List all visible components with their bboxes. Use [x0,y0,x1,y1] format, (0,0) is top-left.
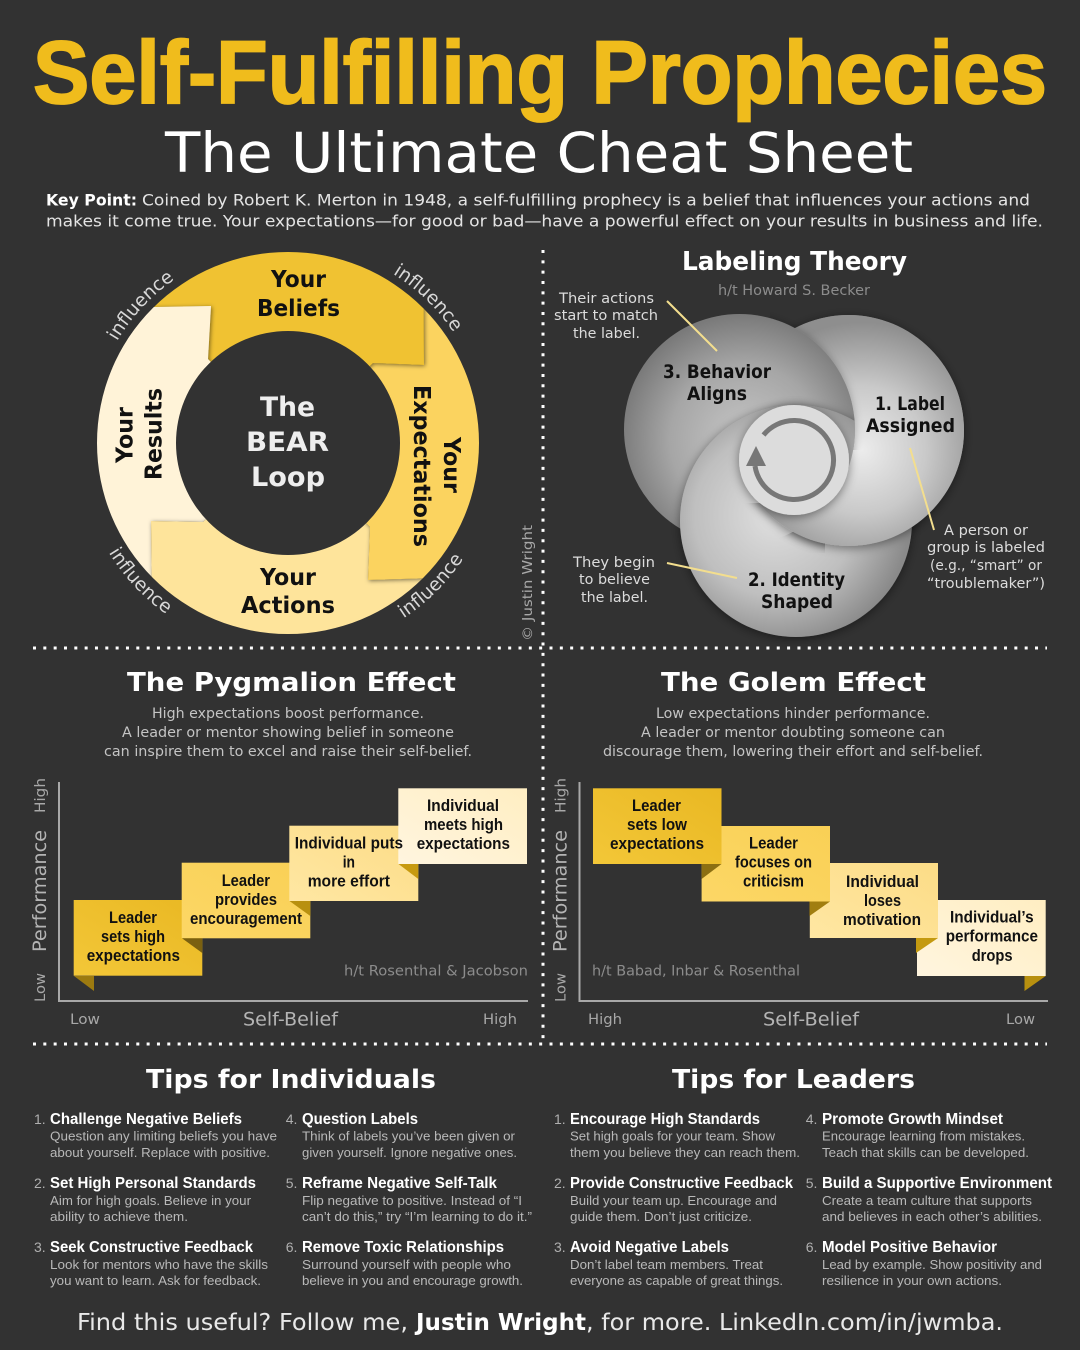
step 1: sets low [627,816,687,834]
footer: , for more. LinkedIn.com/in/jwmba. [586,1310,1003,1336]
x axis labels: Self-Belief [243,1008,339,1030]
step 2: Leader [749,835,799,853]
y axis labels [29,778,51,1002]
step 4: expectations [417,835,510,853]
tip 4: given yourself. Ignore negative ones. [302,1145,517,1160]
label: label assigned: Assigned [866,415,955,437]
icon: cycle arrow [746,421,834,500]
tip 2: Build your team up. Encourage and [570,1193,777,1208]
x axis labels: Self-Belief [763,1008,860,1030]
y axis labels: Performance [29,830,51,952]
panel: pygmalion effect [29,668,528,1030]
label: behavior aligns: Aligns [687,383,747,405]
step 4: Individual’s [950,909,1034,927]
callout: behavior: start to match [554,308,658,324]
footer [77,1310,1003,1336]
y axis labels [549,778,571,1002]
pinwheel circles [624,314,964,637]
label: behavior aligns: 3. Behavior [663,361,772,383]
tip 3: everyone as capable of great things. [570,1273,783,1288]
label: the BEAR loop: BEAR [246,427,329,458]
description [603,706,983,760]
tip 3 [554,1239,783,1288]
tip 2: Aim for high goals. Believe in your [50,1193,252,1208]
step 3: in [343,854,355,872]
step 4: meets high [424,816,503,834]
tip 1: Encourage High Standards [570,1111,760,1128]
description: discourage them, lowering their effort and self-belief. [603,744,983,760]
tip 2: guide them. Don’t just criticize. [570,1209,752,1224]
callout: label: “troublemaker”) [927,576,1045,592]
step 2: focuses on [735,854,812,872]
label: your expectations: Your [438,436,464,494]
step 1: Leader [632,797,682,815]
tip 4: Think of labels you’ve been given or [302,1129,516,1144]
callout: identity [572,555,655,606]
description: High expectations boost performance. [152,706,424,722]
step 4: performance [946,928,1038,946]
y axis labels: Low [554,973,570,1002]
tip 6: Remove Toxic Relationships [302,1239,504,1256]
tip 3: Seek Constructive Feedback [50,1239,253,1256]
tip 1: Set high goals for your team. Show [570,1129,776,1144]
x axis labels: High [588,1012,622,1028]
label: your actions: Actions [241,593,335,619]
label: your beliefs: Your [270,267,327,293]
label: your results: Results [142,388,168,480]
label: your expectations: Expectations [408,385,434,547]
label: your expectations [408,385,464,547]
step 2 [182,863,310,953]
panel: labeling theory [554,247,1045,637]
description: can inspire them to excel and raise their self-belief. [104,744,472,760]
callout: label [927,523,1045,592]
step 2 [702,826,830,916]
key point text block [46,191,1043,231]
tip 4: Question Labels [302,1111,418,1128]
tip 3: Don’t label team members. Treat [570,1257,763,1272]
step 2: criticism [743,873,804,891]
copyright: © Justin Wright [520,525,536,641]
heading: The Golem Effect [661,668,926,698]
label: the BEAR loop: The [260,392,315,423]
tip 2: ability to achieve them. [50,1209,188,1224]
step 3: Individual [846,873,919,891]
tip 1: Challenge Negative Beliefs [50,1111,242,1128]
callout: identity: They begin [572,555,655,571]
attribution: h/t Babad, Inbar & Rosenthal [592,964,800,980]
tip 5: and believes in each other’s abilities. [822,1209,1042,1224]
tip 2: Set High Personal Standards [50,1175,256,1192]
x axis labels: Low [70,1012,100,1028]
tip 1: them you believe they can reach them. [570,1145,800,1160]
ring segments [97,252,479,634]
label: identity shaped [748,569,846,613]
subtitle: The Ultimate Cheat Sheet [164,121,913,185]
tip 1 [554,1111,800,1160]
description: A leader or mentor showing belief in someone [122,725,454,741]
key point text block: Key Point: [46,191,137,210]
tip 4 [286,1111,517,1160]
tip 4 [806,1111,1029,1160]
x axis labels: High [483,1012,517,1028]
tip 6 [286,1239,523,1288]
step 1: expectations [87,947,180,965]
step 3 [289,826,418,916]
tip 3: Look for mentors who have the skills [50,1257,269,1272]
callout: identity: to believe [579,572,650,588]
tip 5 [286,1175,532,1224]
tip 2 [34,1175,256,1224]
influence labels: influence [106,273,174,340]
tip 6: believe in you and encourage growth. [302,1273,523,1288]
panel: golem effect [549,668,1048,1030]
tip 4: Teach that skills can be developed. [822,1145,1029,1160]
tip 5: 5. [806,1175,817,1191]
step 3: more effort [308,873,390,891]
tip 2: 2. [34,1175,46,1191]
panel: BEAR loop [97,252,479,634]
tip 1: 1. [554,1111,566,1127]
step 4: drops [972,947,1013,965]
step 2: Leader [222,872,271,890]
panel: tips for individuals [34,1065,532,1288]
footer: Find this useful? Follow me, [77,1310,408,1336]
heading: The Pygmalion Effect [127,668,456,698]
tip 5: Flip negative to positive. Instead of “I [302,1193,522,1208]
staircase chart [549,778,1048,1030]
tip 5: Reframe Negative Self-Talk [302,1175,497,1192]
x axis labels: Low [1006,1012,1035,1028]
title: Self-Fulfilling Prophecies [33,22,1047,122]
x axis labels [70,1008,517,1030]
step 1: Leader [109,909,158,927]
step 4 [295,788,527,879]
tip 3: you want to learn. Ask for feedback. [50,1273,261,1288]
key point text block: Coined by Robert K. Merton in 1948, a self-fulfilling prophecy is a belief that influences your actions and [142,191,1030,210]
y axis labels: Performance [549,830,571,952]
label: the BEAR loop: Loop [251,462,325,493]
description: A leader or mentor doubting someone can [641,725,945,741]
influence labels [106,262,462,618]
influence labels: influence [394,262,460,331]
tip 4: 4. [286,1111,297,1127]
label: your actions [241,565,335,619]
panel: tips for leaders [554,1065,1053,1288]
influence labels: influence [110,546,170,613]
tip 1 [34,1111,277,1160]
step 3: loses [864,892,901,910]
y axis labels: High [33,778,49,813]
callout: label: A person or [944,523,1028,539]
tip 6: 6. [286,1239,297,1255]
tip 6 [806,1239,1042,1288]
staircase chart [29,778,528,1030]
step 3: motivation [843,911,921,929]
heading: Tips for Individuals [146,1065,436,1095]
influence labels: influence [397,555,462,618]
label: your actions: Your [259,565,317,591]
label: your results [113,388,168,480]
heading: Tips for Leaders [672,1065,915,1095]
label: the BEAR loop [246,392,329,493]
tip 2: 2. [554,1175,566,1191]
tip 6: Surround yourself with people who [302,1257,511,1272]
tip 5: Build a Supportive Environment [822,1175,1053,1192]
callout: behavior: the label. [573,326,640,342]
y axis labels: Low [33,973,49,1002]
step 3 [810,863,938,953]
callout: label: (e.g., “smart” or [930,558,1042,574]
tip 3: 3. [34,1239,46,1255]
label: identity shaped: Shaped [761,591,833,613]
step 4: Individual [427,797,499,815]
callout: behavior [554,291,658,342]
tip 6: resilience in your own actions. [822,1273,1002,1288]
callout: identity: the label. [581,590,648,606]
tip 5 [806,1175,1053,1224]
tip 6: Lead by example. Show positivity and [822,1257,1042,1272]
step 1: expectations [610,835,704,853]
step 4 [917,900,1046,991]
description: Low expectations hinder performance. [656,706,930,722]
tip 1: about yourself. Replace with positive. [50,1145,270,1160]
callout lines [667,301,934,578]
tip 6: 6. [806,1239,817,1255]
key point text block: makes it come true. Your expectations—for good or bad—have a powerful effect on your results in business and life. [46,212,1043,231]
x axis labels [588,1008,1035,1030]
tip 1: Question any limiting beliefs you have [50,1129,277,1144]
step 2: provides [215,891,277,909]
label: label assigned [866,393,955,437]
tip 3: 3. [554,1239,566,1255]
label: behavior aligns [663,361,772,405]
label: label assigned: 1. Label [875,393,945,415]
tip 2: Provide Constructive Feedback [570,1175,793,1192]
callout: behavior: Their actions [558,291,654,307]
tip 5: 5. [286,1175,297,1191]
label: your beliefs [257,267,340,322]
step 1: sets high [101,928,165,946]
label: your results: Your [113,406,139,464]
callout: label: group is labeled [927,540,1045,556]
tip 3 [34,1239,269,1288]
description [104,706,472,760]
label: identity shaped: 2. Identity [748,569,846,591]
y axis labels: High [554,778,570,813]
step 4: Individual puts [295,835,403,853]
tip 5: can’t do this,” try “I’m learning to do it.” [302,1209,532,1224]
tip 1: 1. [34,1111,46,1127]
attribution: h/t Rosenthal & Jacobson [344,964,528,980]
tip 4: Promote Growth Mindset [822,1111,1004,1128]
tip 3: Avoid Negative Labels [570,1239,729,1256]
heading: Labeling Theory [682,247,907,277]
step 1 [593,788,722,879]
tip 6: Model Positive Behavior [822,1239,997,1256]
tip 4: 4. [806,1111,817,1127]
tip 5: Create a team culture that supports [822,1193,1033,1208]
footer: Justin Wright [414,1310,586,1336]
attribution: h/t Howard S. Becker [718,283,870,299]
tip 4: Encourage learning from mistakes. [822,1129,1025,1144]
label: your beliefs: Beliefs [257,296,340,322]
tip 2 [554,1175,793,1224]
step 1 [74,900,202,991]
step 2: encouragement [190,910,302,928]
